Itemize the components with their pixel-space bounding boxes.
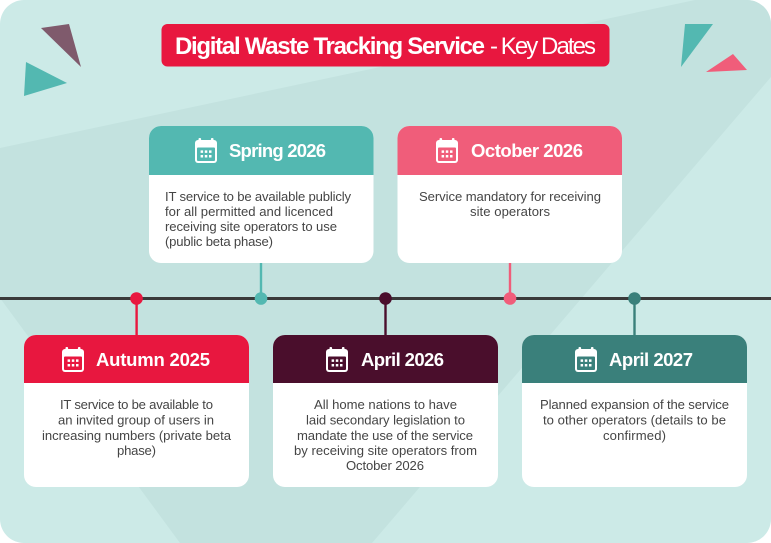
text: Autumn 2025 description: phase) <box>117 443 156 458</box>
icon: calendar <box>326 347 348 372</box>
header: April 2026 <box>273 335 498 383</box>
text: April 2026 description: mandate the use of the service <box>297 428 473 443</box>
text: April 2026 description <box>294 397 477 473</box>
marker: April 2027 <box>628 292 641 336</box>
icon: purple triangle <box>41 24 81 67</box>
marker: April 2026 <box>379 292 392 336</box>
header: April 2027 <box>522 335 747 383</box>
heading: April 2026: April 2026 <box>361 349 444 370</box>
panel: April 2026 <box>273 335 498 487</box>
text: October 2026 description: Service mandatory for receiving <box>419 189 601 204</box>
text: Spring 2026 description <box>165 189 351 249</box>
text: Spring 2026 description: (public beta phase) <box>165 234 273 249</box>
heading: Autumn 2025: Autumn 2025 <box>96 349 210 370</box>
text: Autumn 2025 description: IT service to be available to <box>60 397 213 412</box>
panel: April 2027 <box>522 335 747 487</box>
text: April 2026 description: All home nations to have <box>314 397 457 412</box>
heading: Spring 2026: Spring 2026 <box>229 140 326 161</box>
icon: teal triangle left <box>24 62 67 96</box>
text: April 2026 description: October 2026 <box>346 458 424 473</box>
icon: pink triangle <box>706 54 747 72</box>
text: April 2027 description: Planned expansion of the service <box>540 397 729 412</box>
text: April 2027 description <box>540 397 729 443</box>
panel: Autumn 2025 <box>24 335 249 487</box>
heading: October 2026: October 2026 <box>471 140 583 161</box>
title: Digital Waste Tracking Service <box>175 33 485 60</box>
title: - Key Dates <box>490 33 596 60</box>
text: Autumn 2025 description: increasing numbers (private beta <box>42 428 232 443</box>
timeline axis <box>0 297 771 300</box>
text: Spring 2026 description: receiving site operators to use <box>165 219 337 234</box>
text: October 2026 description: site operators <box>470 204 550 219</box>
marker: Spring 2026 <box>255 262 267 305</box>
heading: April 2027: April 2027 <box>609 349 693 370</box>
icon: calendar <box>62 347 84 372</box>
text: October 2026 description <box>419 189 601 219</box>
text: April 2026 description: laid secondary legislation to <box>306 412 465 428</box>
panel: Spring 2026 <box>149 126 374 263</box>
text: Autumn 2025 description <box>42 397 232 458</box>
text: Spring 2026 description: for all permitted and licenced <box>165 204 333 219</box>
icon: calendar <box>575 347 597 372</box>
text: April 2026 description: by receiving site operators from <box>294 443 477 458</box>
text: Spring 2026 description: IT service to be available publicly <box>165 189 351 204</box>
marker: October 2026 <box>504 262 516 305</box>
panel: October 2026 <box>398 126 622 263</box>
text: Autumn 2025 description: an invited group of users in <box>58 412 214 428</box>
icon: calendar <box>436 138 458 163</box>
title <box>162 24 610 66</box>
icon: calendar <box>195 138 217 163</box>
header: Spring 2026 <box>149 126 374 175</box>
marker: Autumn 2025 <box>130 292 143 336</box>
text: April 2027 description: to other operators (details to be <box>543 412 726 428</box>
header: October 2026 <box>398 126 622 175</box>
header: Autumn 2025 <box>24 335 249 383</box>
text: April 2027 description: confirmed) <box>603 428 666 443</box>
icon: teal triangle right <box>681 24 713 67</box>
